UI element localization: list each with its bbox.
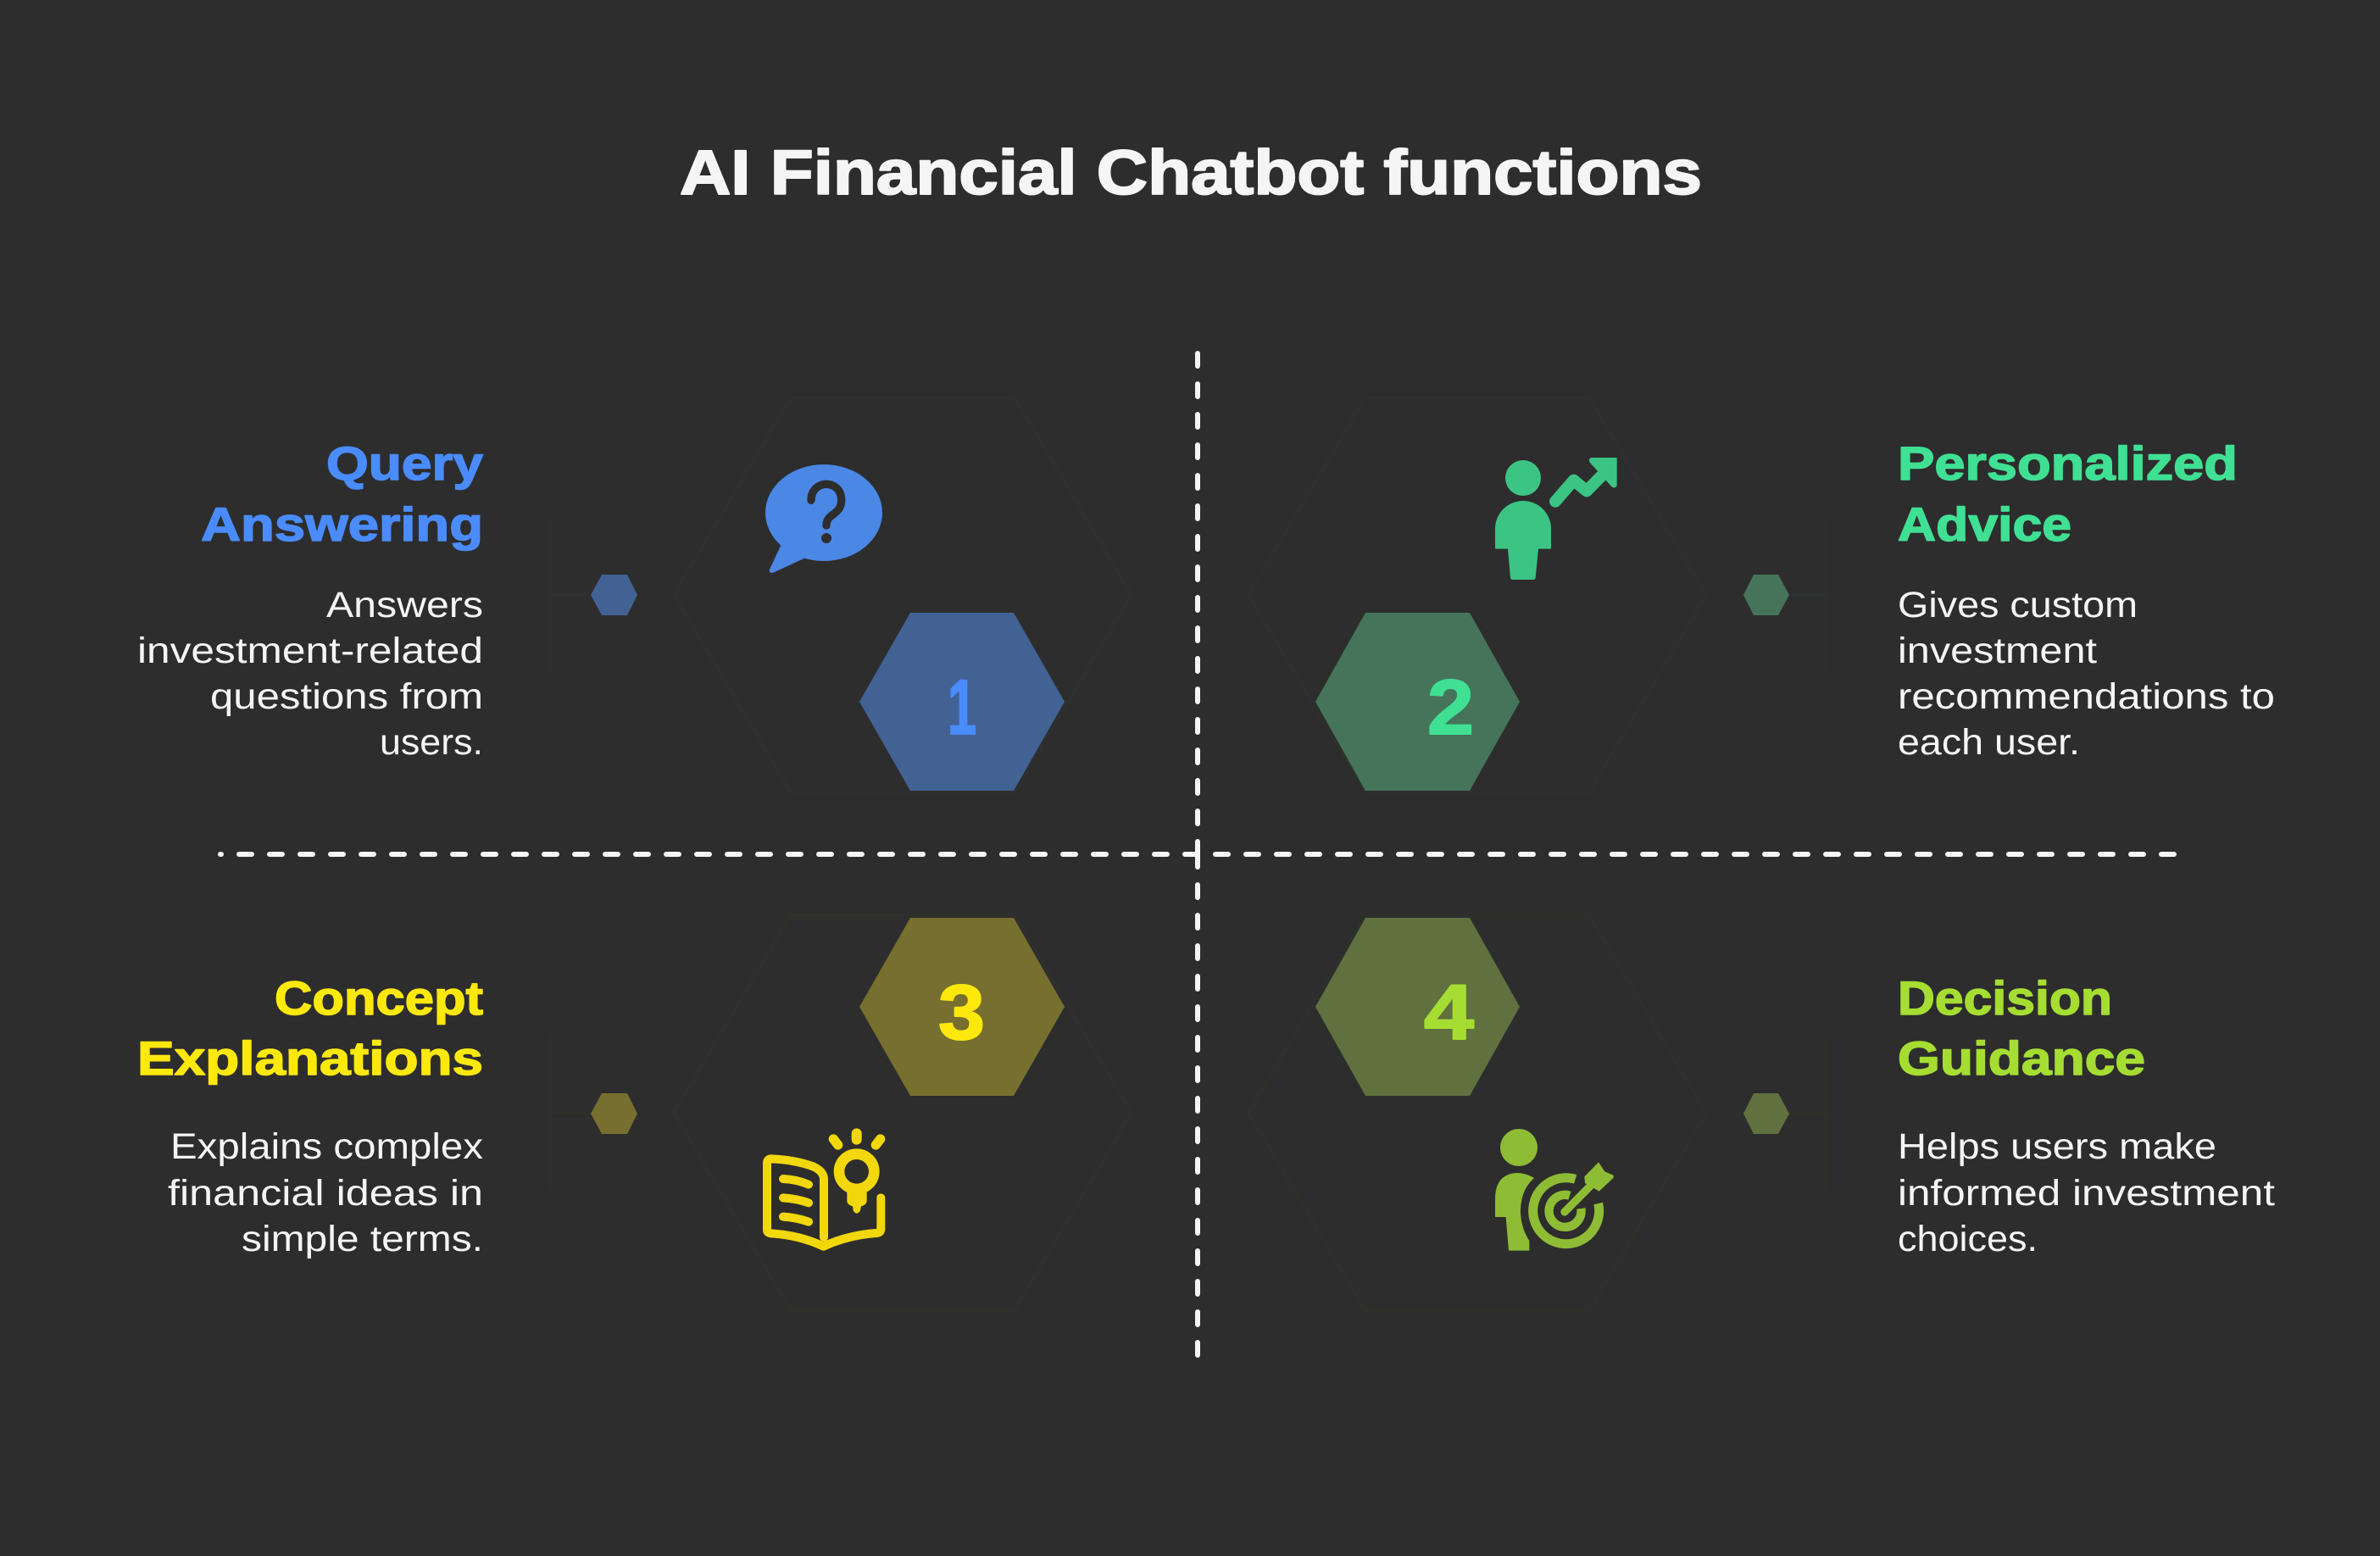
number hexagon 1 [859, 613, 1065, 791]
description: personalized advice: recommendations to [1898, 676, 2275, 717]
heading: decision guidance [1898, 971, 2145, 1085]
number hexagon 2: 2 [1427, 664, 1474, 751]
number hexagon 2 [1315, 613, 1520, 791]
description: decision guidance: Helps users make [1898, 1126, 2216, 1167]
description: query answering: investment-related [137, 631, 483, 671]
panel: concept explanations [137, 918, 1065, 1259]
description: personalized advice: investment [1898, 631, 2097, 671]
heading: concept explanations: Explanations [137, 1031, 483, 1085]
description: personalized advice [1898, 585, 2275, 763]
heading: query answering [201, 436, 483, 551]
description: decision guidance: informed investment [1898, 1173, 2275, 1214]
heading: concept explanations [137, 971, 483, 1085]
number hexagon 4: 4 [1424, 970, 1474, 1056]
number hexagon 3 [859, 918, 1065, 1096]
heading: personalized advice [1898, 436, 2238, 551]
number hexagon 1: 1 [948, 664, 976, 751]
number hexagon 4 [1315, 918, 1520, 1096]
description: decision guidance [1898, 1126, 2275, 1259]
description: concept explanations: simple terms. [242, 1219, 483, 1259]
panel: decision guidance [1315, 918, 2275, 1259]
heading: decision guidance: Guidance [1898, 1031, 2145, 1085]
description: personalized advice: each user. [1898, 722, 2080, 763]
icon: open book with light bulb [767, 1133, 881, 1247]
description: concept explanations: financial ideas in [168, 1173, 483, 1214]
small hexagon marker 1 [591, 575, 637, 615]
heading: personalized advice: Advice [1898, 497, 2071, 551]
icon: person with rising arrow [1495, 458, 1617, 580]
title: AI Financial Chatbot functions [680, 137, 1702, 208]
icon: question speech bubble [765, 464, 882, 573]
small hexagon marker 2 [1743, 575, 1789, 615]
description: query answering [137, 585, 483, 763]
panel: query answering [137, 436, 1065, 791]
heading: concept explanations: Concept [275, 971, 483, 1025]
heading: query answering: Answering [201, 497, 483, 551]
description: decision guidance: choices. [1898, 1219, 2038, 1259]
description: concept explanations [168, 1126, 484, 1259]
description: query answering: Answers [326, 585, 483, 625]
dashed quadrant dividers [220, 353, 2178, 1356]
small hexagon marker 4 [1743, 1093, 1789, 1134]
icon: person with target and arrow [1495, 1129, 1614, 1251]
description: query answering: users. [380, 722, 483, 763]
description: query answering: questions from [210, 676, 483, 717]
description: personalized advice: Gives custom [1898, 585, 2138, 625]
description: concept explanations: Explains complex [170, 1126, 484, 1167]
heading: query answering: Query [326, 436, 483, 490]
heading: decision guidance: Decision [1898, 971, 2112, 1025]
small hexagon marker 3 [591, 1093, 637, 1134]
panel: personalized advice [1315, 436, 2275, 791]
number hexagon 3: 3 [938, 970, 985, 1056]
heading: personalized advice: Personalized [1898, 436, 2238, 490]
